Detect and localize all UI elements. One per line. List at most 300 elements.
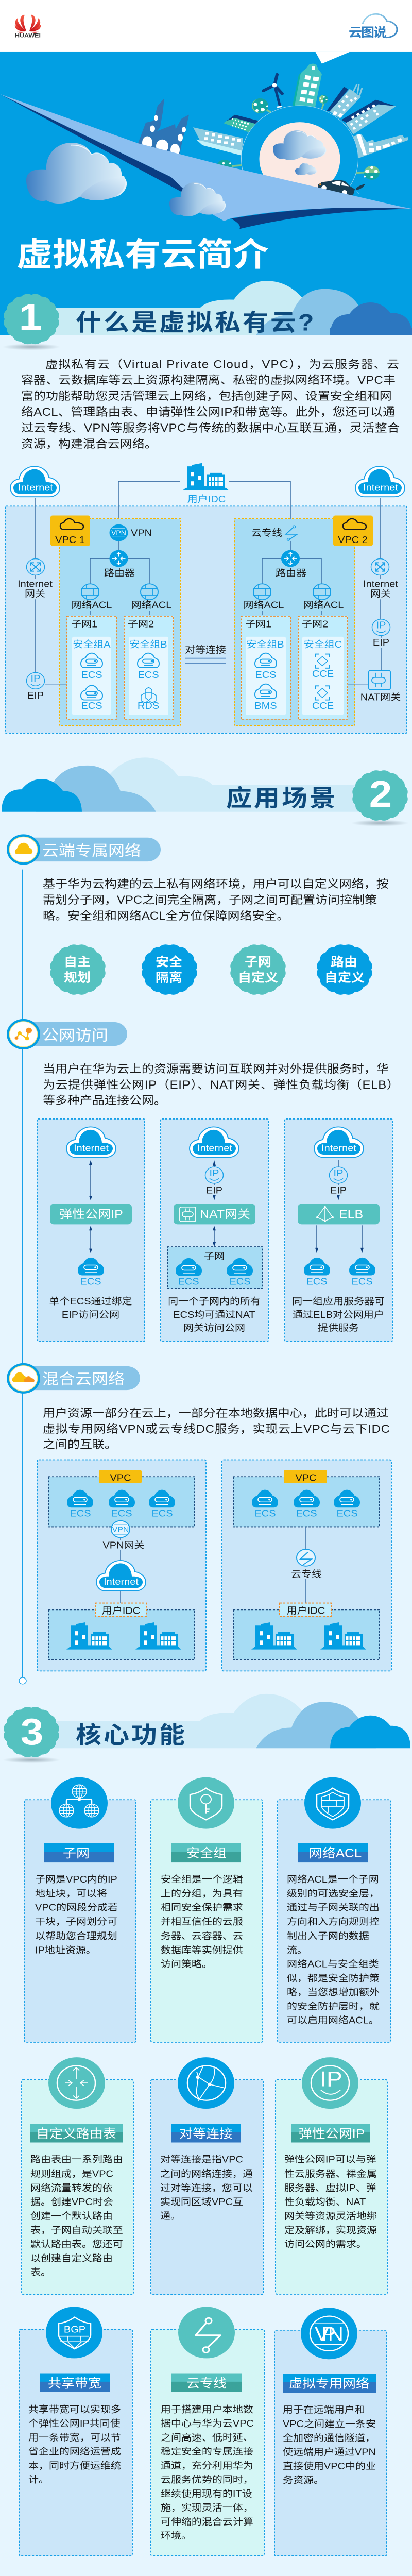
connectors [35, 481, 381, 673]
panel: ELB access: ELB [339, 1208, 363, 1221]
icon: ACL 3 [244, 584, 284, 611]
card: 网络ACL: 网络ACL是一个子网 [287, 1874, 379, 1885]
illustration: clouds [26, 143, 226, 216]
card: 弹性公网IP: 服务器、虚拟IP、弹 [284, 2183, 376, 2194]
panel: VPC1 subnet 2: RDS [138, 701, 159, 711]
badge: 子网自定义: 子网 [245, 956, 271, 969]
building: church [138, 98, 189, 159]
badge: 自主规划 [50, 944, 106, 995]
card: 共享带宽: 用一条带宽，可以节 [28, 2432, 121, 2443]
badge: 路由自定义: 路由 [331, 955, 357, 969]
panel: IDC box [233, 1603, 380, 1660]
icon: Internet right: Internet [363, 483, 399, 493]
intro paragraph: 容器、云数据库等云上资源构建隔离、私密的虚拟网络环境。VPC丰 [21, 374, 396, 386]
building: tilted block [341, 100, 396, 134]
icon: router arrows [57, 2065, 95, 2100]
main title: 虚拟私有云简介 [16, 236, 269, 273]
card: 子网: 子网是VPC内的IP [35, 1874, 117, 1885]
panel: VPC1 subnet 1: 安全组A [73, 639, 111, 650]
icon: EIP left: EIP [27, 691, 44, 701]
panel: EIP access: 单个ECS通过绑定 [49, 1296, 132, 1307]
peering connection: 对等连接 [185, 645, 226, 655]
icon: 云图说 logo: 云图说 [349, 26, 387, 40]
intro paragraph [21, 358, 400, 450]
card: 网络ACL: 似，都是安全防护策 [287, 1973, 380, 1984]
card: 自定义路由表: 创建一个默认路由 [30, 2211, 113, 2222]
panel: ELB access: EIP [330, 1185, 347, 1196]
panel: VPC2 subnet 1: BMS [254, 701, 277, 711]
heading text: 什么是虚拟私有云? [76, 310, 316, 336]
badge number 1 [4, 294, 59, 344]
card: 安全组 [151, 1777, 263, 2042]
icon: car [318, 180, 365, 195]
panel: VPC2 subnet 1: 安全组B [246, 639, 284, 650]
decorative header clouds [52, 1694, 410, 1748]
icon: EIP right: EIP [373, 638, 389, 648]
panel: VPC box: ECS [151, 1509, 173, 1519]
icon: Huawei logo [15, 15, 41, 39]
panel: VPC box: ECS [336, 1509, 358, 1519]
icon: NAT gateway: NAT网关 [360, 692, 401, 703]
badge number 3: 3 [21, 1711, 43, 1753]
card: 对等连接: 过对等连接，您可以 [160, 2183, 253, 2194]
intro paragraph: 过云专线、VPN等服务将VPC与传统的数据中心互联互通，灵活整合 [21, 421, 400, 434]
icon: NAT white [180, 1207, 196, 1222]
card: 子网: 子网 [63, 1847, 90, 1860]
card: 共享带宽: 共享带宽可以实现多 [28, 2404, 121, 2415]
card: 对等连接: 之间的网络连接，通 [160, 2169, 253, 2179]
icon: direct connect [251, 526, 297, 540]
panel: ELB access: 通过ELB对公网用户 [293, 1310, 384, 1320]
panel: VPC2 subnet 2: 子网2 [302, 620, 328, 630]
icon: lightning line [196, 2318, 220, 2353]
card: 子网: 地址块，可以将 [35, 1888, 107, 1899]
card: 网络ACL: 方向和入方向规则控 [287, 1917, 380, 1927]
badge: 子网自定义 [230, 944, 286, 995]
text: 公网访问 body: 当用户在华为云上的资源需要访问互联网并对外提供服务时，华 [43, 1062, 389, 1075]
panel: EIP access: EIP访问公网 [62, 1310, 119, 1320]
panel: VPC2 subnet 2 [298, 616, 348, 719]
icon: internet gateway right [363, 559, 399, 599]
panel: EIP access: Internet [74, 1143, 109, 1154]
icon: router 1: 路由器 [104, 568, 135, 579]
text: 混合云网络 body: 之间的互联。 [43, 1438, 117, 1451]
card: 安全组: 务器、云容器、云 [161, 1931, 243, 1942]
card: 网络ACL: 通过与子网关联的出 [287, 1902, 380, 1913]
card: 云专线: 继续使用现有的IT设 [161, 2488, 252, 2499]
card: 安全组: 上的分组，为具有 [161, 1888, 243, 1899]
icon: Huawei logo: HUAWEI [15, 32, 41, 39]
icon: BGP shield [59, 2317, 91, 2349]
panel: ELB access [285, 1119, 392, 1342]
panel: VPN hybrid [37, 1460, 206, 1671]
icon: tree small [319, 95, 328, 109]
panel: VPC2 subnet 2: 安全组C [304, 639, 342, 650]
panel: ELB access: Internet [321, 1143, 357, 1154]
text: 混合云网络 body [43, 1406, 390, 1451]
icon: EIP right: IP [376, 620, 386, 631]
card: 弹性公网IP: 定及解绑，实现资源 [284, 2225, 377, 2236]
card: 虚拟专用网络: VPC之间建立一条安 [283, 2419, 376, 2430]
panel: NAT gateway access: ECS均可通过NAT [173, 1310, 255, 1320]
icon: IP ring: IP [320, 2067, 342, 2091]
card: 自定义路由表: 以创建自定义路由 [30, 2253, 113, 2264]
panel: IDC box [48, 1603, 195, 1660]
panel: ELB access: ECS [306, 1277, 328, 1287]
section 1 heading: 什么是虚拟私有云 [3, 281, 412, 350]
card: 网络ACL: 制出入子网的数据 [287, 1931, 369, 1942]
subheading: 公网访问 [7, 1019, 127, 1049]
text: 公网访问 body: 为云提供弹性公网IP（EIP）、NAT网关、弹性负载均衡（ELB） [43, 1078, 399, 1091]
panel: NAT gateway access: Internet [197, 1143, 233, 1154]
card: 自定义路由表: 据。创建VPC时会 [30, 2197, 113, 2208]
hero banner background [0, 52, 412, 335]
panel: EIP access: 弹性公网IP [59, 1208, 123, 1221]
panel: cloud region [5, 506, 407, 733]
icon: user IDC building: 用户IDC [187, 494, 226, 505]
panel: VPC 1 [60, 519, 180, 726]
icon: NAT gateway [360, 670, 401, 703]
icon: VPN ring: VPN [315, 2323, 344, 2345]
panel: NAT gateway access: EIP [206, 1185, 222, 1196]
card: 自定义路由表: 自定义路由表 [36, 2127, 116, 2141]
badge number 2: 2 [369, 773, 392, 815]
icon: wind turbine [263, 74, 282, 107]
panel: IDC box: 用户IDC [287, 1605, 325, 1616]
icon: 云图说 logo [349, 14, 397, 40]
panel: NAT gateway access [161, 1119, 268, 1342]
panel: VPC 2 [234, 519, 355, 726]
panel: VPC box: ECS [254, 1509, 276, 1519]
intro paragraph: 络ACL、管理路由表、申请弹性公网IP和带宽等。此外，您还可以通 [21, 405, 395, 418]
section 2 heading: 应用场景 [2, 757, 409, 826]
card: 弹性公网IP: 性负载均衡、NAT [284, 2197, 366, 2208]
card: 网络ACL: 流。 [287, 1945, 307, 1956]
card: 网络ACL: 的安全防护层时，就 [287, 2001, 380, 2012]
icon: Internet left [10, 466, 60, 497]
subheading: 云端专属网络: 云端专属网络 [42, 843, 141, 859]
panel: ELB access: 同一组应用服务器可 [292, 1296, 385, 1307]
VPC lines [45, 541, 369, 684]
card: 云专线: 环境。 [161, 2531, 192, 2541]
badge: 路由自定义: 自定义 [324, 971, 365, 985]
card: 弹性公网IP: 访问公网的需求。 [284, 2239, 367, 2250]
card: 对等连接: 通。 [160, 2211, 181, 2222]
subheading: 云端专属网络 [7, 834, 161, 865]
icon: two clouds [12, 1372, 35, 1382]
card: 弹性公网IP [276, 2057, 387, 2294]
panel: VPC box: ECS [296, 1509, 317, 1519]
card: 虚拟专用网络: 直接使用VPC中的业 [283, 2461, 376, 2472]
icon: ELB white [316, 1206, 334, 1222]
badge shadow [351, 820, 409, 826]
panel: VPC2 subnet 2: CCE [312, 669, 334, 680]
card: 安全组: 安全组 [186, 1846, 227, 1860]
card: 虚拟专用网络: 全加密的通信隧道， [283, 2433, 375, 2444]
icon: user IDC building [183, 463, 229, 505]
icon: direct connect gateway [291, 1549, 322, 1580]
peering connection [185, 645, 226, 664]
panel: ELB access: 提供服务 [318, 1323, 359, 1333]
decorative header clouds [2, 757, 360, 812]
card: 子网 [24, 1777, 136, 2042]
card: 自定义路由表: 表，子网自动关联至 [30, 2225, 123, 2236]
icon: ACL 2: 网络ACL [131, 600, 171, 611]
badge: 子网自定义: 自定义 [238, 971, 278, 985]
card: 虚拟专用网络: 虚拟专用网络 [289, 2377, 369, 2391]
panel: VPC2 subnet 1: ECS [255, 670, 277, 681]
card: 弹性公网IP: 网关等资源灵活地绑 [284, 2211, 377, 2222]
panel: VPC1 subnet 2 [124, 616, 174, 719]
card: 安全组: 数据库等实例提供 [161, 1945, 243, 1956]
intro paragraph: 资源，构建混合云网络。 [21, 437, 157, 450]
card: 网络ACL: 级别的可选安全层， [287, 1888, 380, 1899]
panel: subnet: 子网 [204, 1251, 225, 1262]
illustration: planet [241, 106, 358, 212]
panel: VPC box: VPC [295, 1473, 317, 1483]
card: 云专线: 可伸缩的混合云计算 [161, 2517, 253, 2528]
icon: VPN [109, 524, 152, 541]
icon: nodes [14, 1028, 32, 1040]
icon: Internet left: Internet [18, 483, 54, 493]
card: 云专线: 施，实现灵活一体， [161, 2503, 253, 2513]
card: 网络ACL: 网络ACL与安全组类 [287, 1959, 379, 1970]
arrow: double [89, 1160, 92, 1200]
icon: VPN: VPN [111, 529, 126, 537]
panel: NAT gateway access: IP [210, 1168, 219, 1179]
card: 共享带宽: 个弹性公网IP共同使 [28, 2418, 121, 2429]
card: 云专线: 稳定安全的专属连接 [161, 2446, 253, 2457]
panel: ELB access: ECS [351, 1277, 373, 1287]
panel: VPC box [233, 1470, 380, 1527]
card: 共享带宽: 计。 [28, 2475, 49, 2485]
header strip with logos [0, 0, 412, 52]
tag: VPC 1: VPC 1 [55, 535, 85, 546]
badge: 安全隔离: 安全 [156, 955, 182, 969]
card: 子网: 干块，子网划分可 [35, 1917, 117, 1927]
panel: subnet: ECS [229, 1277, 251, 1287]
icon: router 2 [276, 550, 306, 579]
card: 共享带宽 [19, 2307, 132, 2556]
timeline end dot [19, 1677, 26, 1684]
section 3 heading: 核心功能 [3, 1694, 410, 1763]
card: 安全组: 安全组是一个逻辑 [161, 1874, 243, 1885]
card: 网络ACL [278, 1777, 391, 2042]
card: 网络ACL: 网络ACL [309, 1846, 362, 1860]
panel: VPC2 subnet 1: 子网1 [245, 620, 271, 630]
icon: VPN gateway: VPN [112, 1526, 129, 1534]
intro paragraph: 富的功能帮助您灵活管理云上网络，包括创建子网、设置安全组和网 [21, 389, 392, 402]
card: 云专线: 用于搭建用户本地数 [161, 2404, 253, 2415]
panel: VPC1 subnet 2: ECS [138, 670, 159, 681]
card: 对等连接: 实现同区域VPC互 [160, 2197, 243, 2208]
building: L shape [353, 134, 408, 158]
building: teal block [224, 115, 259, 132]
icon: direct connect: 云专线 [251, 528, 282, 538]
building: hotel [327, 84, 362, 118]
icon: direct connect gateway: 云专线 [291, 1569, 322, 1580]
card: 安全组: 并相互信任的云服 [161, 1917, 243, 1927]
panel: VPC2 subnet 1 [241, 616, 290, 719]
panel: VPC1 subnet 2: 安全组B [129, 639, 167, 650]
card: 网络ACL: 可以启用网络ACL。 [287, 2015, 379, 2026]
card: 安全组: 访问策略。 [161, 1959, 212, 1970]
icon: yellow cloud [15, 843, 32, 854]
panel: VPC1 subnet 2: 子网2 [128, 620, 154, 630]
card: 共享带宽: 共享带宽 [48, 2377, 101, 2390]
panel: VPC1 subnet 1: ECS [81, 670, 102, 681]
icon: IP ring [311, 2065, 349, 2100]
card: 对等连接 [151, 2057, 263, 2295]
icon: network globe [187, 2065, 226, 2101]
panel: VPC1 subnet 1 [67, 616, 116, 719]
card: 自定义路由表 [22, 2057, 133, 2295]
badge number 2 [352, 770, 408, 821]
decorative white notch [315, 52, 351, 64]
icon: ACL 1: 网络ACL [72, 600, 112, 611]
panel: NAT gateway access: NAT网关 [200, 1208, 250, 1221]
badge shadow [3, 1757, 60, 1763]
panel: VPN hybrid: Internet [104, 1577, 139, 1587]
icon: VPN gateway: VPN网关 [102, 1540, 145, 1551]
decorative header clouds [52, 281, 412, 335]
panel: EIP access [37, 1119, 145, 1342]
card: 弹性公网IP: 弹性公网IP可以与弹 [284, 2154, 376, 2165]
subheading: 混合云网络: 混合云网络 [42, 1371, 125, 1387]
icon: EIP right [372, 619, 390, 648]
icon: subnet globes [59, 1785, 99, 1817]
badge: 自主规划: 自主 [64, 955, 91, 969]
panel: NAT gateway access: 网关访问公网 [183, 1323, 245, 1333]
card: 云专线: 云服务优势的同时， [161, 2475, 253, 2485]
icon: VPN gateway [102, 1521, 145, 1551]
card: 共享带宽: 本，同时方便运维统 [28, 2461, 121, 2471]
panel: subnet: ECS [178, 1277, 199, 1287]
text: 云端专属网络 body: 需划分子网，VPC之间完全隔离，子网之间可配置访问控制策 [43, 893, 377, 906]
tag: VPC 2 [333, 516, 373, 546]
panel: EIP access: ECS [80, 1277, 101, 1287]
icon: internet gateway left [18, 559, 53, 599]
text: 公网访问 body [43, 1062, 399, 1107]
icon: shield with key [190, 1788, 222, 1820]
card: 自定义路由表: 表。 [30, 2267, 51, 2278]
card: 虚拟专用网络 [274, 2308, 387, 2556]
text: 云端专属网络 body: 基于华为云构建的云上私有网络环境，用户可以自定义网络，按 [43, 877, 389, 890]
badge: 路由自定义 [317, 944, 372, 995]
icon: router 2: 路由器 [276, 568, 306, 579]
card: 自定义路由表: 规则组成，是VPC [30, 2169, 113, 2179]
subheading: 混合云网络 [7, 1363, 140, 1394]
illustration: paper plane [0, 94, 412, 229]
card: 自定义路由表: 默认路由表。您还可 [30, 2239, 123, 2250]
panel: IDC box: 用户IDC [102, 1605, 140, 1616]
icon: tree left [252, 98, 271, 113]
icon: BGP shield: BGP [64, 2325, 85, 2335]
intro paragraph: 虚拟私有云（Virtual Private Cloud，VPC），为云服务器、云 [45, 358, 399, 370]
card: 子网: 以帮助您合理规划 [35, 1931, 117, 1942]
icon: VPN ring [310, 2316, 348, 2351]
icon: tree lower left [217, 160, 242, 174]
badge: 安全隔离: 隔离 [156, 971, 182, 985]
card: 虚拟专用网络: 用于在远端用户和 [283, 2405, 365, 2416]
icon: Internet right [355, 466, 405, 497]
tag: VPC 2: VPC 2 [338, 535, 368, 546]
icon: shield with wall [317, 1788, 349, 1820]
icon: router 1 [104, 550, 135, 579]
icon: ACL 2 [131, 584, 171, 611]
badge: 自主规划: 规划 [64, 971, 91, 985]
text: 公网访问 body: 等多种产品连接公网。 [43, 1094, 166, 1107]
panel: NAT gateway access: 同一个子网内的所有 [168, 1296, 261, 1307]
card: 虚拟专用网络: 务资源。 [283, 2475, 324, 2486]
card: 虚拟专用网络: 使远端用户通过VPN [283, 2447, 376, 2458]
card: 云专线: 之间高速、低时延、 [161, 2432, 253, 2443]
panel: VPC box [48, 1470, 195, 1527]
icon: internet gateway left: Internet [18, 579, 53, 589]
panel: VPC box: VPC [110, 1473, 131, 1483]
heading text: 应用场景 [226, 786, 337, 811]
heading text: 核心功能 [76, 1722, 187, 1749]
panel: VPC2 subnet 2: CCE [312, 701, 334, 711]
icon: EIP left [27, 672, 44, 701]
icon: VPN: VPN [131, 528, 152, 538]
badge: 安全隔离 [142, 944, 197, 995]
card: 自定义路由表: 路由表由一系列路由 [30, 2154, 123, 2165]
tag: VPC 1 [50, 516, 90, 546]
card: 自定义路由表: 网络流量转发的依 [30, 2183, 113, 2194]
card: 共享带宽: 省企业的网络运营成 [28, 2446, 121, 2457]
building: left block [193, 127, 243, 156]
card: 云专线 [151, 2307, 264, 2556]
text: 混合云网络 body: 虚拟专用网络VPN或云专线DC服务，实现云上VPC与云下IDC [43, 1422, 390, 1435]
card: 对等连接: 对等连接 [179, 2127, 233, 2141]
card: 弹性公网IP: 性云服务器、裸金属 [284, 2169, 377, 2179]
text: 云端专属网络 body [43, 877, 389, 922]
card: 云专线: 据中心与华为云VPC [161, 2418, 254, 2429]
panel: VPC box: ECS [70, 1509, 91, 1519]
icon: ACL 3: 网络ACL [244, 600, 284, 611]
illustration: city buildings [138, 64, 408, 180]
panel: VPC1 subnet 1: ECS [81, 701, 102, 711]
subheading: 公网访问: 公网访问 [42, 1027, 108, 1044]
card: 子网: IP地址资源。 [35, 1945, 96, 1956]
icon: EIP left: IP [31, 674, 40, 684]
arrow: double lower [89, 1226, 92, 1253]
panel: direct connect hybrid [222, 1460, 391, 1671]
icon: ACL 4 [303, 584, 344, 611]
badge number 3 [4, 1707, 59, 1757]
icon: internet gateway right: Internet [363, 579, 399, 589]
panel: VPC box: ECS [111, 1509, 132, 1519]
card: 弹性公网IP: 弹性公网IP [299, 2127, 365, 2141]
panel: ELB access: IP [334, 1168, 343, 1179]
icon: internet gateway right: 网关 [370, 589, 391, 599]
architecture diagram [5, 463, 407, 733]
card: 子网: VPC的网段分成若 [35, 1902, 118, 1913]
icon: internet gateway left: 网关 [25, 589, 45, 599]
card: 云专线: 云专线 [186, 2377, 227, 2390]
icon: ACL 1 [72, 584, 112, 611]
hero illustration: paper plane and city [0, 52, 412, 229]
timeline line [22, 870, 23, 1677]
card: 对等连接: 对等连接是指VPC [160, 2154, 243, 2165]
card: 安全组: 相同安全保护需求 [161, 1902, 243, 1913]
panel: subnet [167, 1247, 263, 1289]
panel: VPC1 subnet 1: 子网1 [71, 620, 97, 630]
card: 网络ACL: 略，当您想增加额外 [287, 1987, 380, 1998]
badge number 1: 1 [19, 296, 42, 338]
text: 云端专属网络 body: 略。安全组和网络ACL全方位保障网络安全。 [43, 909, 289, 922]
